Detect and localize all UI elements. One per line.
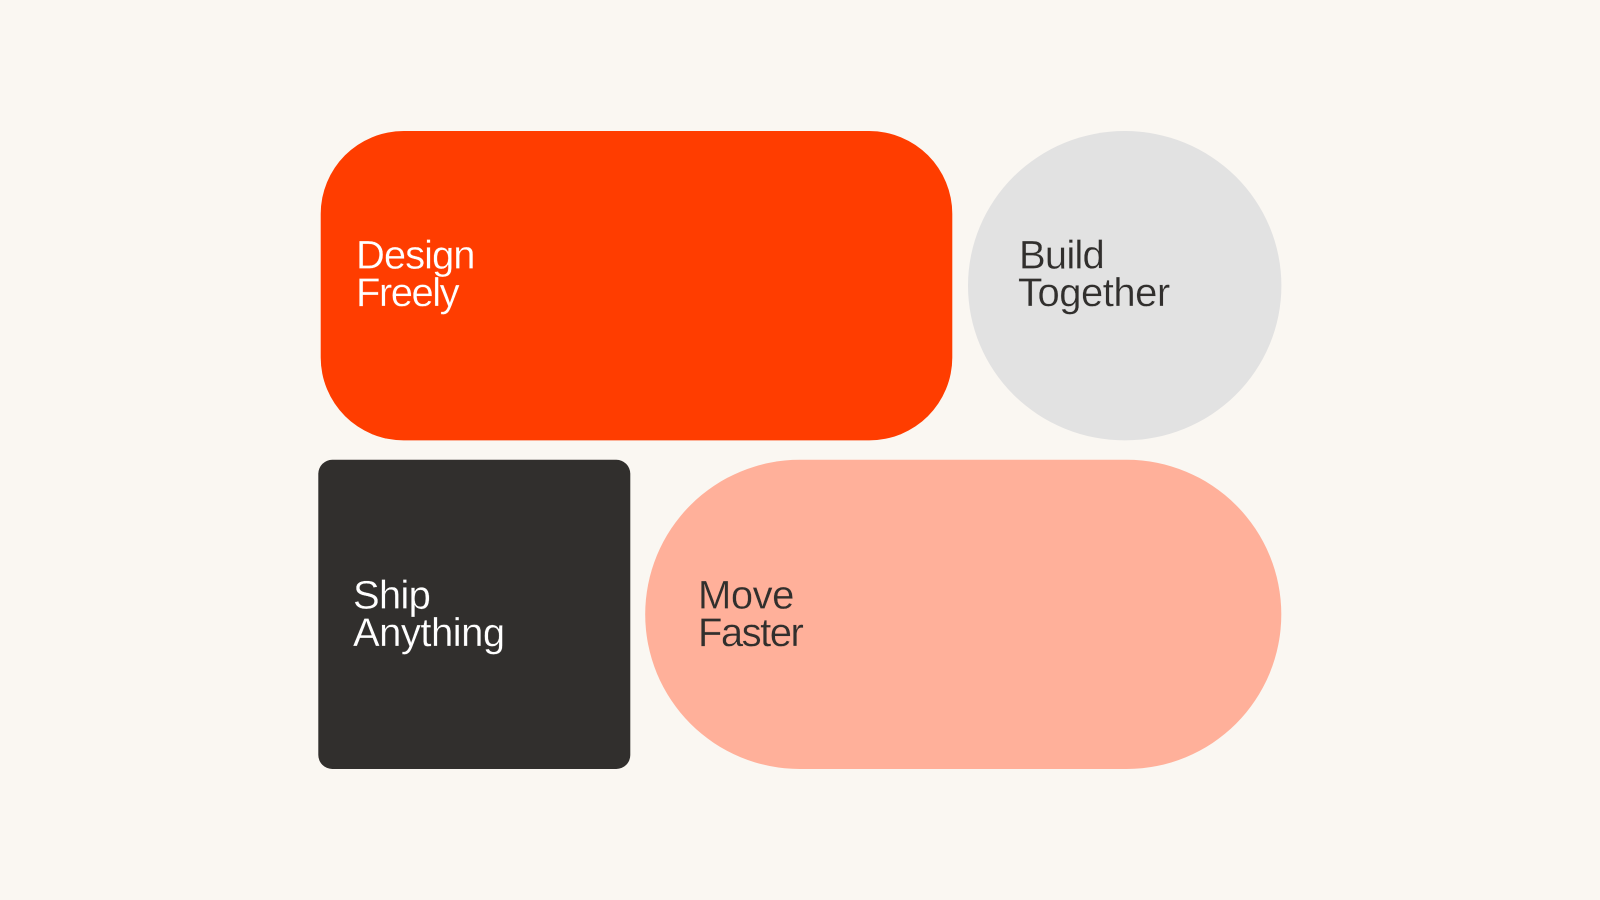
heading: build together: Together: [1018, 271, 1170, 315]
heading: ship anything: Ship: [353, 573, 430, 617]
heading: ship anything: Anything: [353, 611, 505, 655]
heading: move faster: Move: [698, 573, 794, 617]
panel: ship anything: [318, 460, 630, 769]
heading: move faster: Faster: [698, 611, 804, 655]
heading: build together: Build: [1019, 233, 1104, 277]
heading: design freely: Design: [356, 233, 475, 277]
panel: build together: [968, 131, 1281, 440]
panel: move faster: [645, 460, 1281, 769]
panel: design freely: [321, 131, 952, 440]
heading: design freely: Freely: [356, 271, 460, 315]
